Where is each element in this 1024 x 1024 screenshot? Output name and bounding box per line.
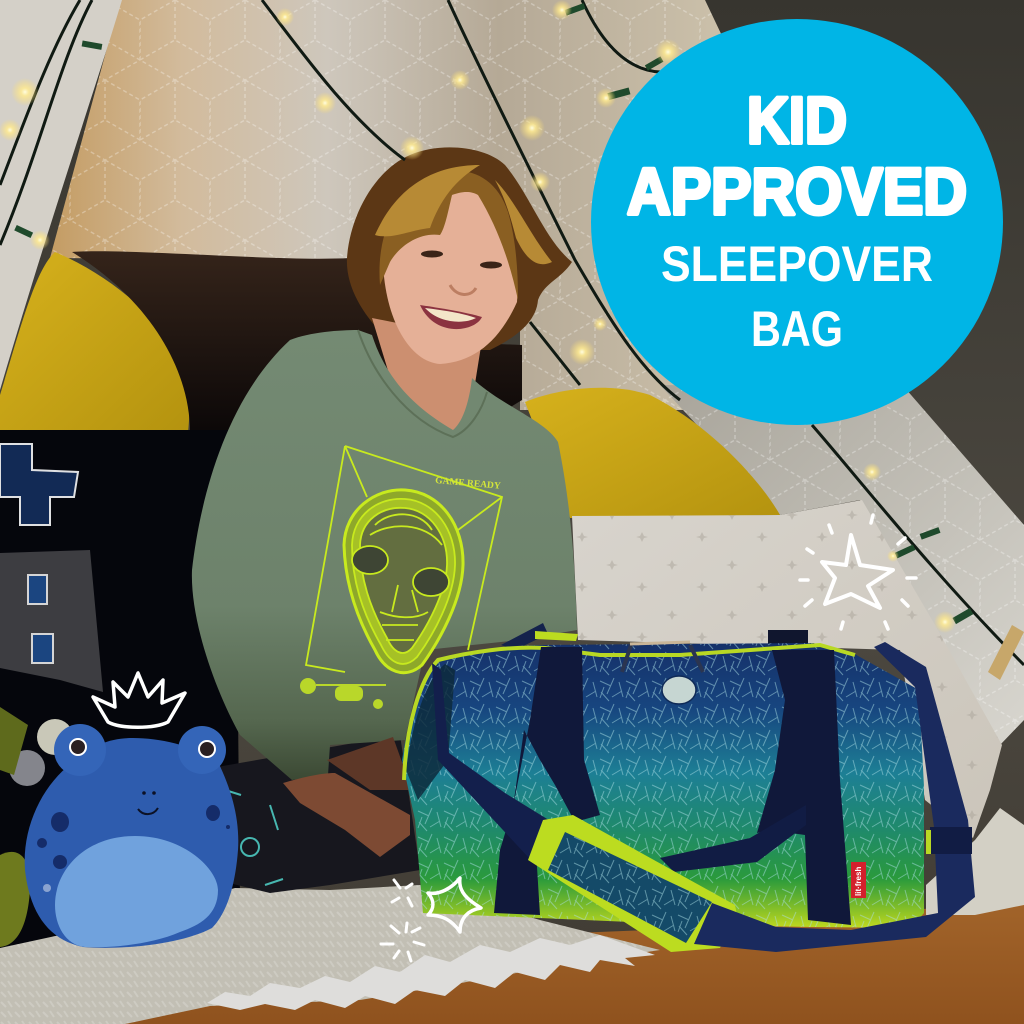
left yellow pillow xyxy=(0,252,189,432)
dark brown pillow xyxy=(72,251,522,432)
badge heading: APPROVED xyxy=(627,154,967,228)
blue frog plush xyxy=(25,724,238,948)
body xyxy=(25,738,238,948)
wood floor xyxy=(100,900,1024,1024)
shirt slogan: GAME READY xyxy=(435,476,501,492)
boy xyxy=(192,147,577,893)
pants xyxy=(217,735,420,893)
badge subheading: SLEEPOVER xyxy=(661,236,933,292)
badge subheading: BAG xyxy=(751,301,843,357)
red brand tag xyxy=(851,862,866,898)
logo badge xyxy=(662,676,696,704)
hands xyxy=(283,737,412,857)
badge heading xyxy=(627,83,967,228)
light glows xyxy=(0,0,956,633)
wooden clothespin xyxy=(988,625,1024,680)
navy cushion with cross xyxy=(0,430,240,960)
shirt graphic xyxy=(306,446,502,673)
smile xyxy=(420,305,482,329)
doodle: crown xyxy=(93,673,185,727)
bag pattern xyxy=(402,643,924,928)
nose xyxy=(450,285,476,294)
blue badge circle xyxy=(591,19,1003,425)
green long-sleeve shirt xyxy=(192,330,577,780)
pants print xyxy=(225,790,283,885)
face xyxy=(138,791,158,814)
back hair xyxy=(347,147,572,350)
doodle: small star with sparks xyxy=(381,878,481,961)
spots xyxy=(37,805,230,892)
left white curtain xyxy=(0,0,122,390)
left shaded panel xyxy=(406,664,455,800)
thin handle loop xyxy=(660,805,806,872)
background toys beside frog xyxy=(0,707,73,947)
left handle straps xyxy=(494,647,600,915)
shoulder strap left xyxy=(432,663,565,868)
bag body xyxy=(402,643,924,928)
badge heading: KID xyxy=(747,83,847,157)
eyes xyxy=(54,724,226,776)
hair highlights xyxy=(375,165,552,264)
quilted tent fabric xyxy=(50,0,1024,745)
badge subheading xyxy=(661,236,933,357)
eyes xyxy=(421,250,502,268)
light bulbs xyxy=(14,3,973,624)
hair fringe xyxy=(379,170,518,300)
duffel bag xyxy=(402,623,975,952)
rug fringe xyxy=(207,935,655,1010)
top loops xyxy=(501,623,808,650)
doodle: large star with sparks xyxy=(800,515,916,629)
white star-print bedding xyxy=(572,500,1002,838)
string lights xyxy=(0,0,1024,665)
shoulder strap right xyxy=(694,642,975,952)
right handle straps xyxy=(757,650,851,925)
right yellow pillow xyxy=(525,388,780,518)
red brand tag: lit·fresh xyxy=(854,867,863,896)
neck xyxy=(372,318,482,436)
shaggy white rug xyxy=(0,808,1024,1024)
shoulder pad xyxy=(528,815,737,952)
controller print xyxy=(300,678,386,709)
lime rim xyxy=(404,645,855,780)
belly xyxy=(55,836,218,947)
buckle xyxy=(926,827,972,854)
collar seam xyxy=(358,330,487,437)
face xyxy=(383,188,517,364)
zipper pulls xyxy=(622,642,703,672)
